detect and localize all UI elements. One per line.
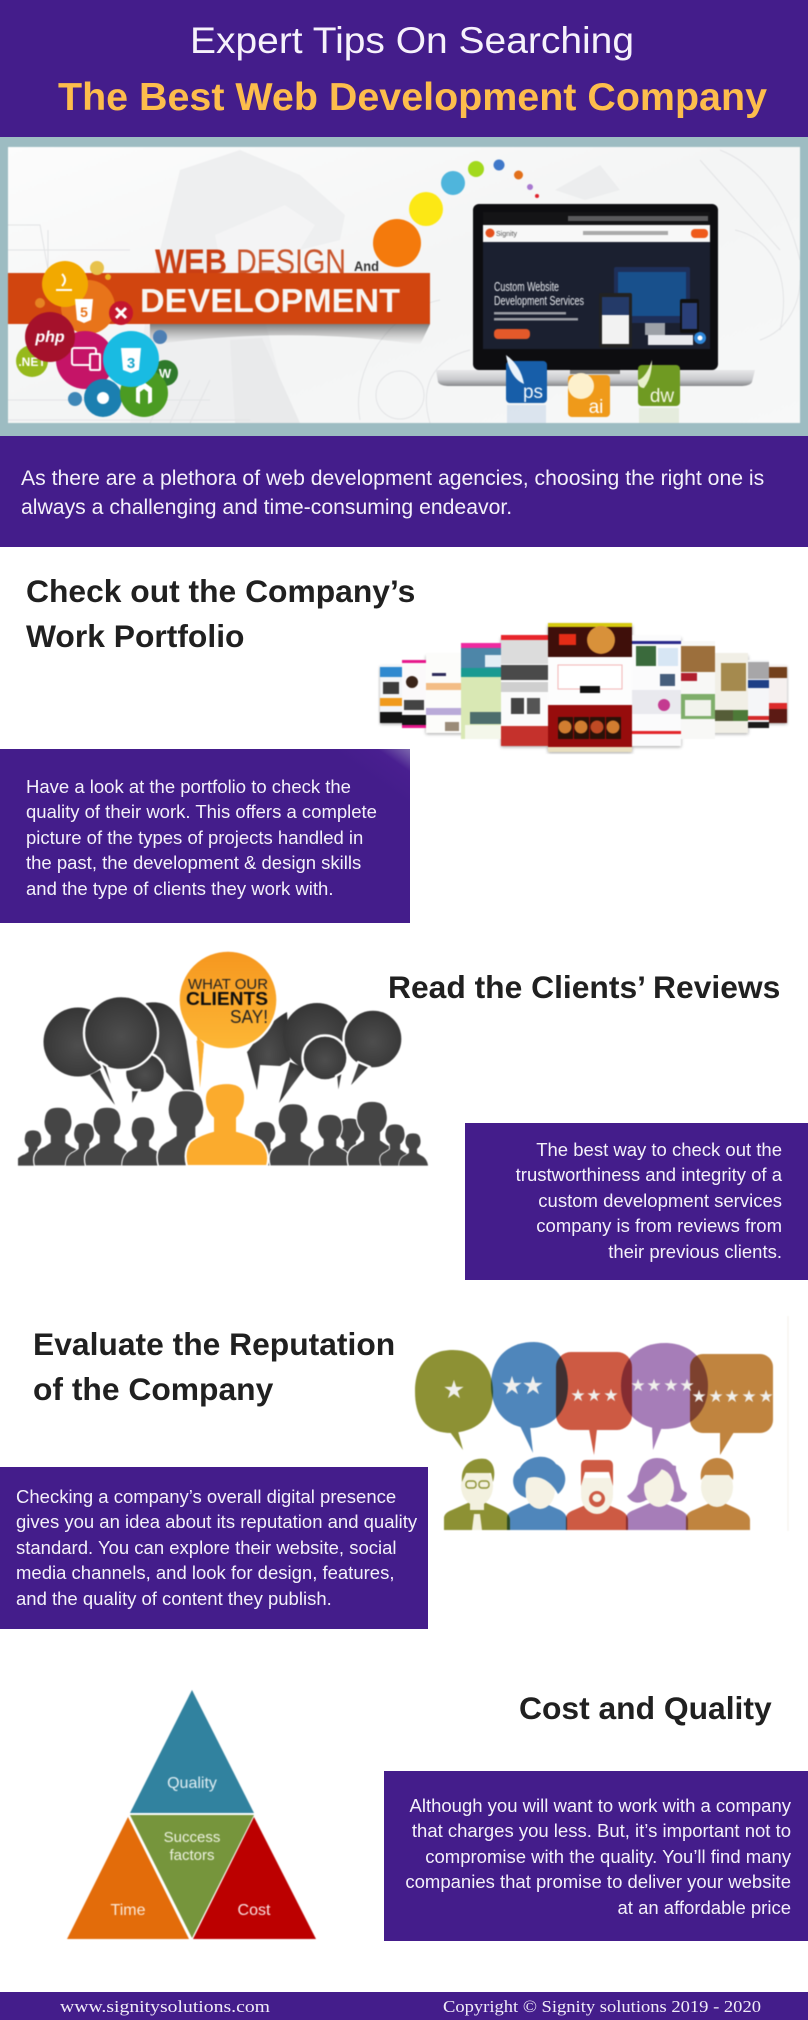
rating stars: ★ xyxy=(724,1387,740,1407)
intro text xyxy=(21,467,764,519)
page tile right 3 xyxy=(715,653,748,733)
icon: dreamweaver xyxy=(638,360,680,423)
reviews paragraph: their previous clients. xyxy=(608,1241,782,1262)
five star bubble xyxy=(690,1354,773,1455)
reviews paragraph: trustworthiness and integrity of a xyxy=(516,1164,782,1185)
portfolio paragraph: picture of the types of projects handled in xyxy=(26,827,363,848)
icon: illustrator: ai xyxy=(589,397,603,418)
heading: reputation: Evaluate the Reputation xyxy=(33,1326,395,1362)
footer xyxy=(0,1992,808,2020)
clients say illustration xyxy=(17,951,429,1166)
rating stars: ★ xyxy=(758,1387,774,1407)
cost paragraph: that charges you less. But, it’s important not to xyxy=(412,1820,791,1841)
panel: reputation text xyxy=(0,1467,428,1629)
intro text: As there are a plethora of web development agencies, choosing the right one is xyxy=(21,467,764,490)
ribbon xyxy=(8,243,430,345)
dark speech bubbles xyxy=(44,996,402,1108)
person: red bearded shouting xyxy=(566,1460,628,1530)
portfolio collage xyxy=(378,622,789,754)
highlighted orange client xyxy=(186,1083,268,1166)
cost paragraph: companies that promise to deliver your website xyxy=(405,1871,791,1892)
panel: cost text xyxy=(384,1771,808,1941)
technology bubbles: php xyxy=(34,329,65,346)
triangle: cost xyxy=(193,1817,316,1939)
footer texts: Copyright © Signity solutions 2019 - 2020 xyxy=(443,1997,761,2016)
intro text: always a challenging and time-consuming endeavor. xyxy=(21,496,512,519)
portfolio paragraph xyxy=(26,776,377,899)
triangle: time: Time xyxy=(111,1902,146,1919)
title xyxy=(58,20,767,119)
laptop: Signity xyxy=(496,231,518,238)
person: olive man with glasses xyxy=(444,1459,510,1530)
icon: illustrator xyxy=(568,373,610,418)
heading: reputation: of the Company xyxy=(33,1371,273,1407)
heading: portfolio: Work Portfolio xyxy=(26,618,244,654)
rating speech bubbles and people xyxy=(414,1316,788,1531)
rating stars: ★ xyxy=(586,1386,602,1406)
reviews paragraph xyxy=(516,1139,782,1262)
page tile 5 xyxy=(501,635,548,746)
title: The Best Web Development Company xyxy=(58,76,767,119)
triangle: success factors xyxy=(130,1815,254,1938)
footer texts: www.signitysolutions.com xyxy=(60,1997,270,2016)
page tile right 2 xyxy=(681,641,715,739)
footer texts xyxy=(60,1997,761,2016)
rating stars: ★ xyxy=(630,1376,646,1396)
four star bubble xyxy=(621,1343,708,1450)
hero band xyxy=(0,137,808,436)
crowd silhouettes xyxy=(15,1090,428,1166)
laptop xyxy=(436,204,755,386)
page tile 3 xyxy=(426,653,461,733)
rating stars: ★ xyxy=(663,1376,679,1396)
triangle: quality: Quality xyxy=(167,1775,217,1792)
icon: dreamweaver: dw xyxy=(650,386,674,407)
ribbon: DEVELOPMENT xyxy=(140,282,400,319)
rating stars: ★ xyxy=(443,1375,465,1404)
page tile far right xyxy=(769,665,787,723)
heading: cost and quality: Cost and Quality xyxy=(519,1690,772,1726)
reviews paragraph: The best way to check out the xyxy=(536,1139,782,1160)
triangle: quality xyxy=(130,1690,254,1813)
orange speech bubble: CLIENTS xyxy=(186,989,268,1009)
cost paragraph: at an affordable price xyxy=(618,1897,791,1918)
three star bubble xyxy=(556,1352,632,1455)
page tile far left xyxy=(380,665,402,723)
portfolio paragraph: the past, the development & design skills xyxy=(26,852,361,873)
triangle: success factors: Success xyxy=(164,1829,220,1846)
cost paragraph xyxy=(405,1795,791,1918)
ribbon: WEB xyxy=(155,243,227,281)
reputation paragraph xyxy=(16,1486,418,1609)
ribbon: And xyxy=(354,258,379,274)
orange speech bubble xyxy=(178,950,278,1092)
rating stars: ★ xyxy=(570,1386,586,1406)
rating stars: ★ xyxy=(679,1376,695,1396)
two star bubble xyxy=(491,1342,568,1453)
orange speech bubble: WHAT OUR xyxy=(188,976,268,993)
page tile 4 xyxy=(461,643,501,739)
orange speech bubble: SAY! xyxy=(230,1007,268,1027)
rating stars xyxy=(443,1371,774,1407)
portfolio paragraph: and the type of clients they work with. xyxy=(26,878,333,899)
rating stars: ★ xyxy=(501,1371,523,1400)
panel: reviews text xyxy=(465,1123,808,1280)
person: blue curly hair xyxy=(507,1457,567,1530)
header band xyxy=(0,0,808,137)
cost paragraph: Although you will want to work with a company xyxy=(410,1795,791,1816)
cost paragraph: compromise with the quality. You’ll find many xyxy=(425,1846,791,1867)
icon: photoshop: ps xyxy=(523,382,543,403)
page tile centre xyxy=(548,623,632,752)
laptop: Development Services xyxy=(494,293,584,308)
icon: photoshop xyxy=(506,355,547,423)
background wrench sketch xyxy=(8,150,800,423)
ribbon: DESIGN xyxy=(236,243,346,281)
portfolio paragraph: quality of their work. This offers a complete xyxy=(26,801,377,822)
one star bubble xyxy=(415,1350,493,1450)
rating stars: ★ xyxy=(603,1386,619,1406)
reputation paragraph: Checking a company’s overall digital presence xyxy=(16,1486,396,1507)
technology bubbles: 5 xyxy=(80,304,88,320)
heading: reputation xyxy=(33,1326,395,1407)
page tile right 1 xyxy=(632,635,681,746)
rating stars: ★ xyxy=(646,1376,662,1396)
reputation paragraph: media channels, and look for design, features, xyxy=(16,1562,394,1583)
intro band xyxy=(0,436,808,547)
reputation paragraph: gives you an idea about its reputation and quality xyxy=(16,1511,417,1532)
technology bubbles: W xyxy=(159,366,172,381)
hero illustration: web design and development xyxy=(7,146,800,424)
rating stars: ★ xyxy=(708,1387,724,1407)
rating stars: ★ xyxy=(522,1371,544,1400)
triangle: success factors: factors xyxy=(169,1847,215,1864)
person: purple wavy hair xyxy=(626,1458,688,1530)
triangle: time xyxy=(67,1817,189,1939)
page tile 2 xyxy=(402,660,426,728)
rating stars: ★ xyxy=(691,1387,707,1407)
reputation paragraph: standard. You can explore their website, social xyxy=(16,1537,397,1558)
panel: portfolio text xyxy=(0,749,410,923)
title: Expert Tips On Searching xyxy=(190,20,634,61)
heading: reviews: Read the Clients’ Reviews xyxy=(388,969,780,1005)
technology bubbles: 3 xyxy=(127,355,135,372)
flying coloured dots xyxy=(373,160,539,267)
rating stars: ★ xyxy=(741,1387,757,1407)
heading: portfolio xyxy=(26,573,415,654)
success factors triangle xyxy=(66,1690,316,1940)
reviews paragraph: company is from reviews from xyxy=(536,1215,782,1236)
technology bubbles xyxy=(16,261,178,417)
technology bubbles: .NET xyxy=(18,355,46,369)
triangle: cost: Cost xyxy=(238,1902,271,1919)
page tile right 4 xyxy=(748,660,769,728)
person: orange fringe xyxy=(686,1458,750,1530)
portfolio paragraph: Have a look at the portfolio to check the xyxy=(26,776,351,797)
heading: portfolio: Check out the Company’s xyxy=(26,573,415,609)
reputation paragraph: and the quality of content they publish. xyxy=(16,1588,332,1609)
reviews paragraph: custom development services xyxy=(538,1190,782,1211)
laptop: Custom Website xyxy=(494,279,559,294)
